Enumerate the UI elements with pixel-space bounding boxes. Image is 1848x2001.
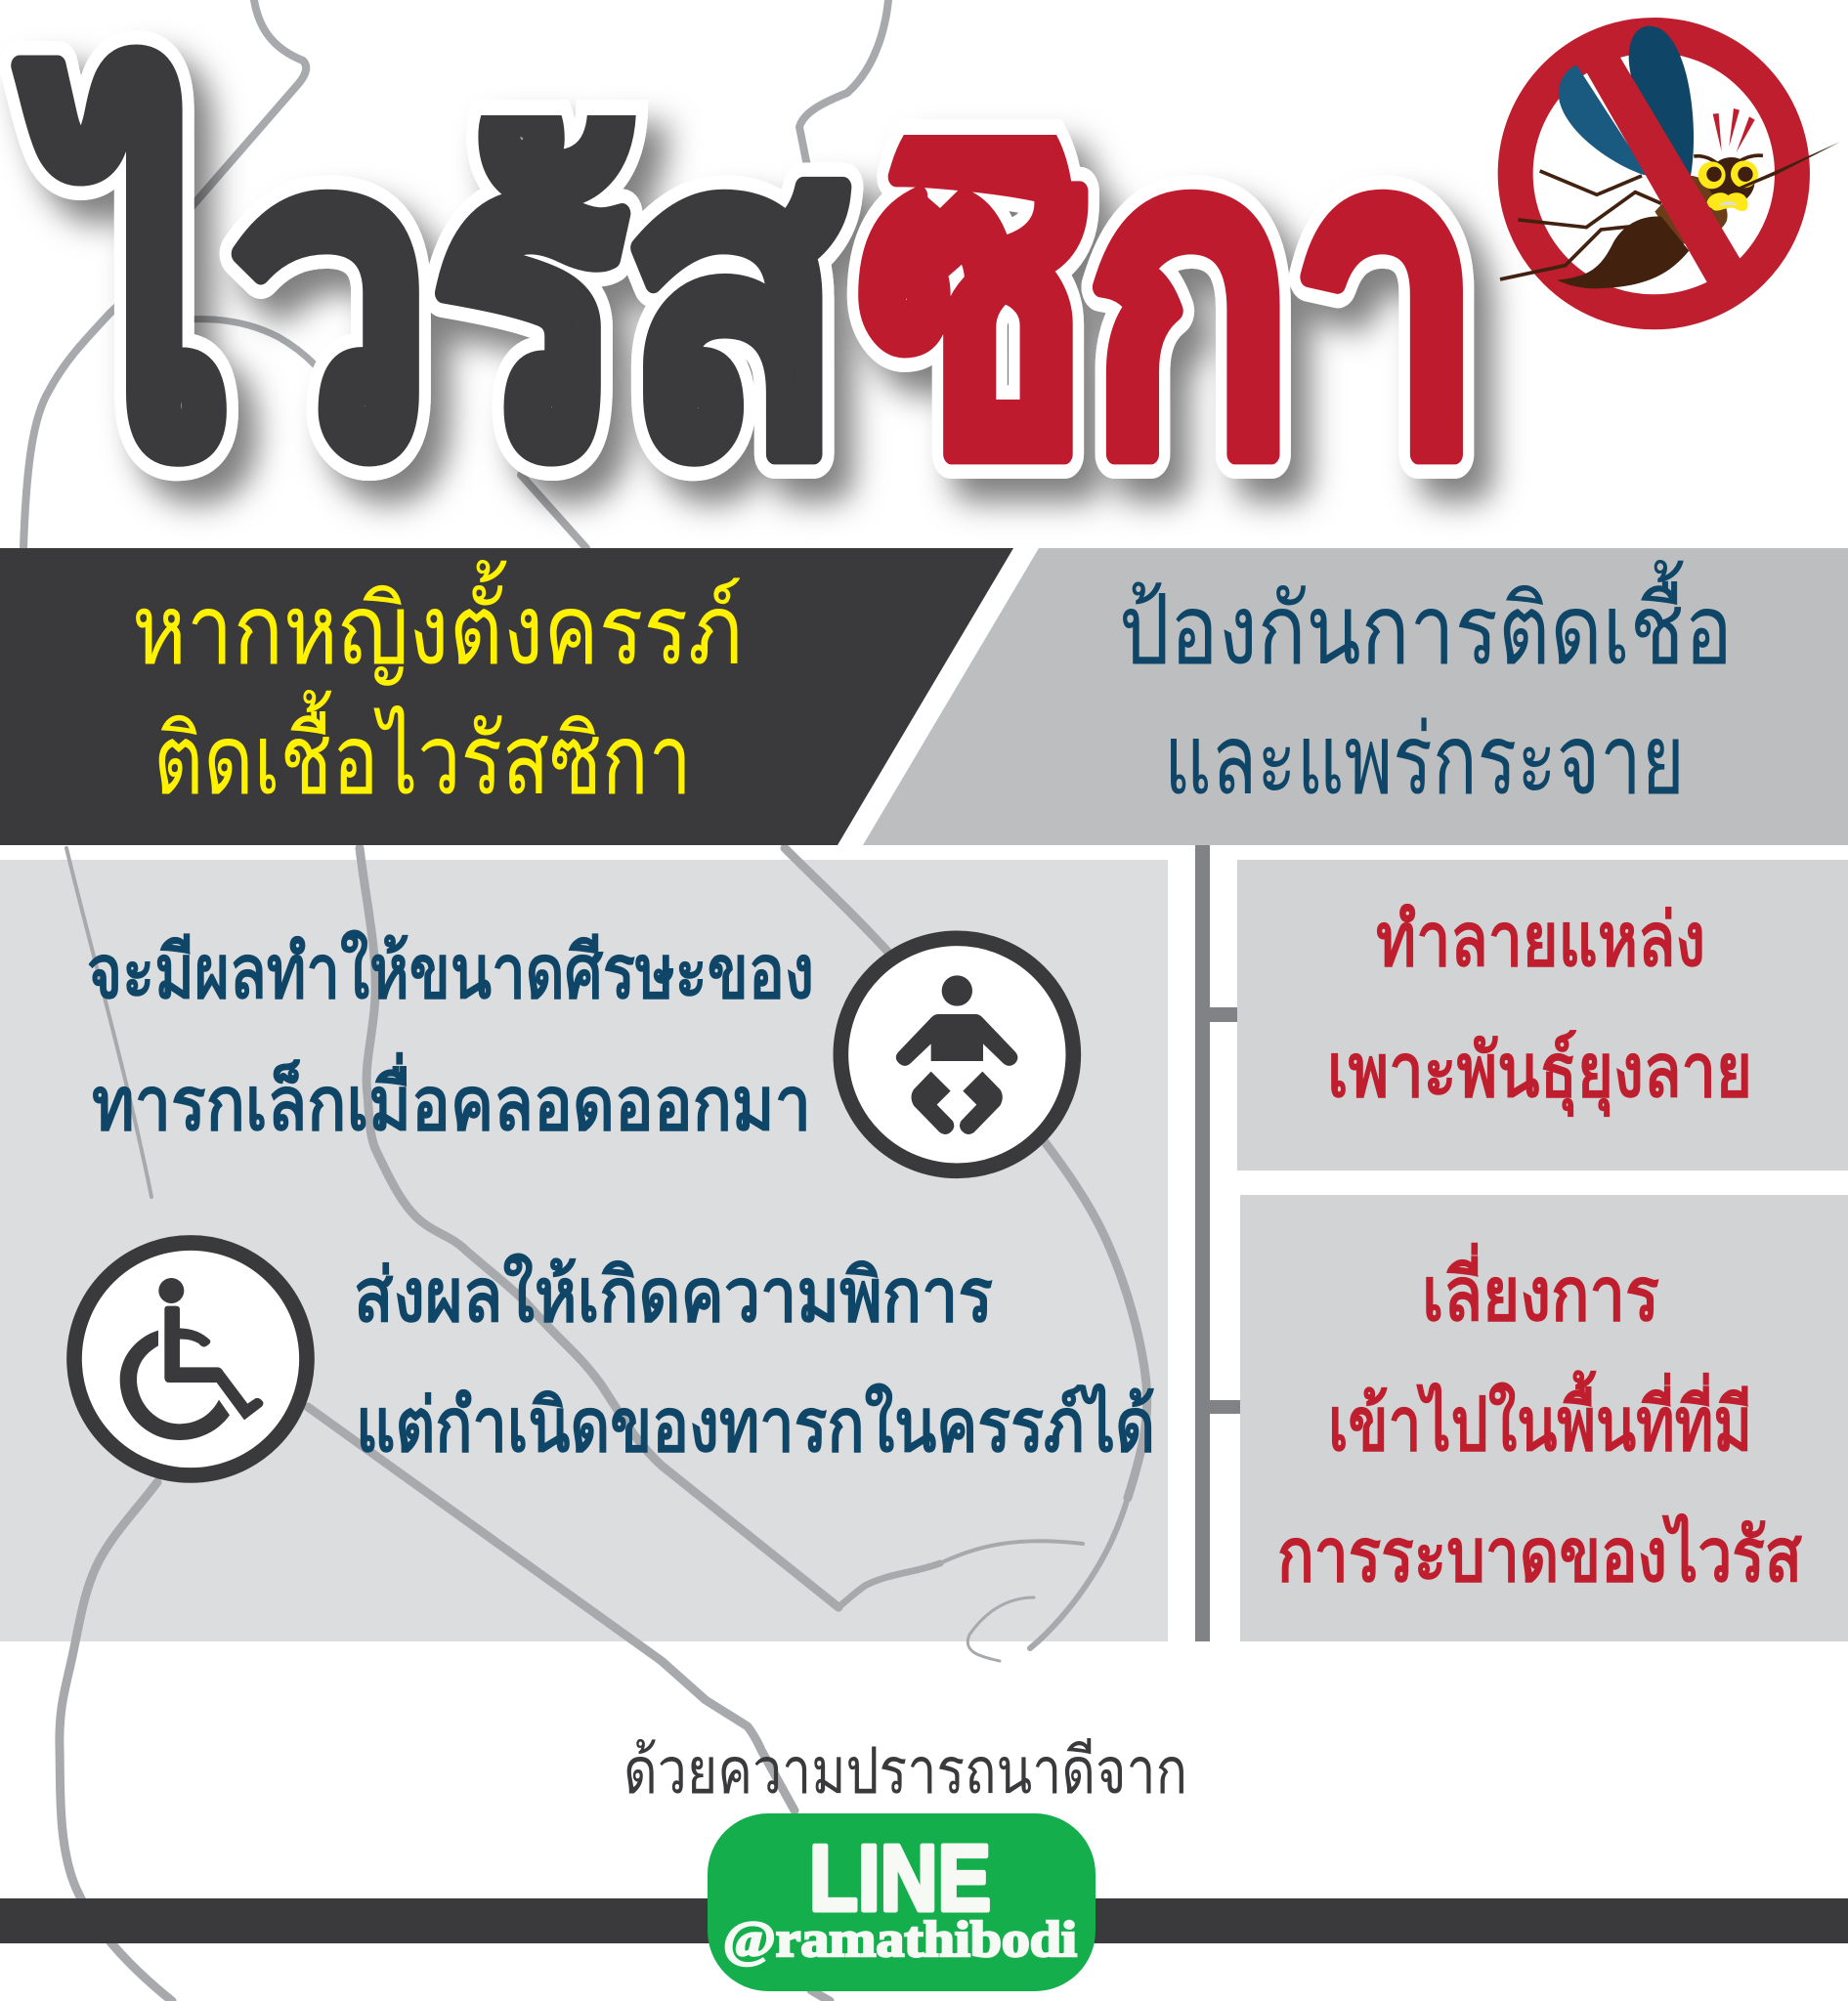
panel: destroy breeding sites bbox=[1237, 860, 1848, 1171]
banner: grey right bbox=[863, 548, 1848, 845]
heading: right banner: และแพร่กระจาย bbox=[1164, 705, 1685, 815]
heading: left banner: ติดเชื้อไวรัสซิกา bbox=[153, 690, 692, 815]
heading: left banner: หากหญิงตั้งครรภ์ bbox=[132, 560, 743, 686]
badge: LINE @ramathibodi bbox=[708, 1813, 1096, 1991]
badge: LINE @ramathibodi: @ramathibodi bbox=[723, 1912, 1077, 1968]
text: microcephaly effect bbox=[87, 929, 814, 1146]
text: microcephaly effect: จะมีผลทำให้ขนาดศีรษะของ bbox=[87, 929, 814, 1014]
connector: vertical bar with branches bbox=[1195, 845, 1240, 1641]
panel: destroy breeding sites: เพาะพันธุ์ยุงลาย bbox=[1327, 1030, 1752, 1118]
heading: right banner: ป้องกันการติดเชื้อ bbox=[1119, 560, 1733, 685]
title: ซิกา bbox=[860, 60, 1482, 539]
text: disability effect: แต่กำเนิดของทารกในครรภ์ได้ bbox=[356, 1383, 1155, 1468]
icon: wheelchair bbox=[74, 1243, 307, 1475]
title: ไวรัส bbox=[18, 51, 843, 539]
icon: baby bbox=[840, 938, 1073, 1171]
panel: avoid outbreak areas: เลี่ยงการ bbox=[1422, 1242, 1659, 1337]
title bbox=[18, 51, 1482, 539]
title: ซิกา bbox=[860, 60, 1482, 539]
text: disability effect bbox=[354, 1253, 1155, 1468]
text: disability effect: ส่งผลให้เกิดความพิการ bbox=[354, 1253, 993, 1338]
text: credit line: ด้วยความปรารถนาดีจาก bbox=[623, 1734, 1187, 1807]
heading: right banner bbox=[1119, 560, 1733, 815]
panel: pregnancy effects background bbox=[0, 860, 1168, 1641]
panel: avoid outbreak areas bbox=[1240, 1195, 1848, 1641]
title: ไวรัส bbox=[18, 51, 843, 539]
text: microcephaly effect: ทารกเล็กเมื่อคลอดออกมา bbox=[92, 1051, 811, 1146]
panel: destroy breeding sites: ทำลายแหล่ง bbox=[1376, 899, 1705, 982]
banner: dark left bbox=[0, 548, 1013, 845]
background: pregnant woman outline bbox=[23, 0, 1147, 2001]
badge: LINE @ramathibodi: LINE bbox=[809, 1826, 991, 1931]
heading: left banner bbox=[132, 560, 743, 815]
footer bar bbox=[0, 1898, 1848, 1943]
icon: no mosquito sign bbox=[1500, 26, 1840, 312]
